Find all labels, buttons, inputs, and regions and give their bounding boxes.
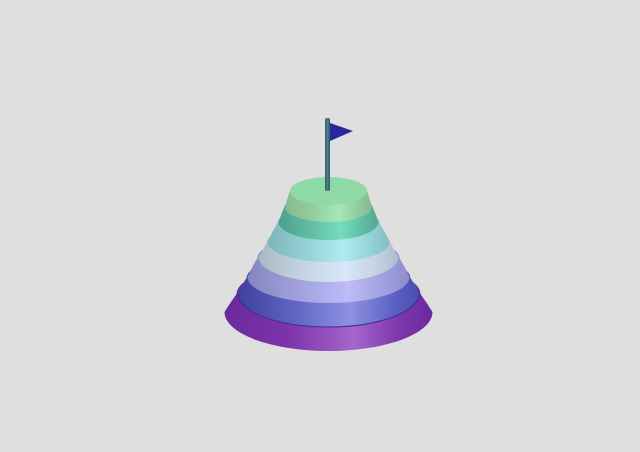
flag: [325, 118, 353, 191]
flag pennant: [330, 123, 353, 141]
cone layer 4: pale blue: [258, 225, 398, 282]
top face of cone: [290, 177, 367, 205]
cone layer 5: lavender: [248, 236, 410, 303]
flag pole: [325, 118, 330, 191]
cone layer 7: purple: [224, 264, 432, 351]
cone layer 6: blue: [238, 254, 420, 327]
cone layer 2: teal: [278, 195, 378, 240]
cone layer 1: pale green with top face: [285, 177, 372, 222]
cone layer 3: light cyan: [268, 207, 390, 262]
